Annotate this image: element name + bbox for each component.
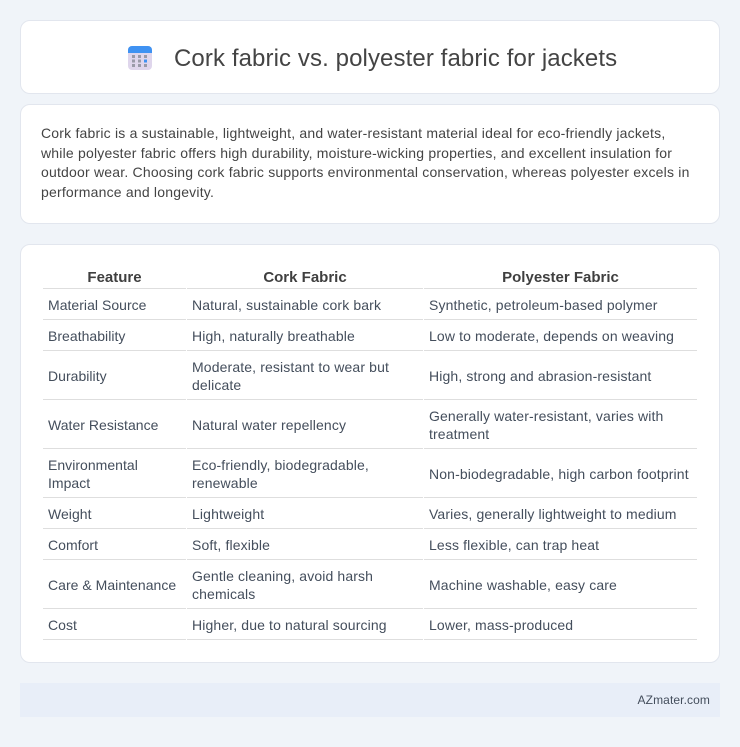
table rows text: Weight	[48, 506, 92, 522]
table rows text: Gentle cleaning, avoid harsh	[192, 568, 373, 584]
table rows text: Natural water repellency	[192, 417, 346, 433]
table rows text: Low to moderate, depends on weaving	[429, 328, 674, 344]
footer credit: AZmater.com	[638, 693, 710, 707]
table rows text: Soft, flexible	[192, 537, 270, 553]
table rows text: Higher, due to natural sourcing	[192, 617, 387, 633]
title: Cork fabric vs. polyester fabric for jackets	[174, 45, 617, 72]
icon: calendar	[128, 46, 152, 70]
table rows text: Comfort	[48, 537, 98, 553]
table rows text: treatment	[429, 426, 489, 442]
table rows text: Synthetic, petroleum-based polymer	[429, 297, 658, 313]
table rows text: Non-biodegradable, high carbon footprint	[429, 466, 689, 482]
header: Feature: Feature	[87, 269, 142, 286]
table rows text: High, naturally breathable	[192, 328, 355, 344]
table rows text: Varies, generally lightweight to medium	[429, 506, 677, 522]
intro text: outdoor wear. Choosing cork fabric supports environmental conservation, whereas polyester excels in	[41, 164, 690, 180]
table rows text: Durability	[48, 368, 107, 384]
header: Cork Fabric	[187, 268, 423, 289]
table rows text: Breathability	[48, 328, 125, 344]
table rows text: Cost	[48, 617, 77, 633]
header: Feature	[43, 268, 186, 289]
table rows text: delicate	[192, 377, 241, 393]
table rows text: Impact	[48, 475, 90, 491]
intro text: Cork fabric is a sustainable, lightweight, and water-resistant material ideal for eco-friendly jackets,	[41, 125, 665, 141]
header: Polyester Fabric	[424, 268, 697, 289]
table rows text: chemicals	[192, 586, 255, 602]
header: Polyester Fabric: Polyester Fabric	[502, 269, 619, 286]
title card	[20, 20, 720, 94]
table rows text: renewable	[192, 475, 258, 491]
table rows text: Material Source	[48, 297, 146, 313]
panel: comparison table	[20, 244, 720, 663]
intro text: performance and longevity.	[41, 184, 214, 200]
table rows text: High, strong and abrasion-resistant	[429, 368, 651, 384]
table rows text: Moderate, resistant to wear but	[192, 359, 389, 375]
table rows text: Lower, mass-produced	[429, 617, 573, 633]
table rows text: Care & Maintenance	[48, 577, 176, 593]
intro text: while polyester fabric offers high durability, moisture-wicking properties, and excellent insulation for	[41, 145, 672, 161]
table rows text: Lightweight	[192, 506, 264, 522]
table rows text: Water Resistance	[48, 417, 158, 433]
table rows text: Eco-friendly, biodegradable,	[192, 457, 369, 473]
table rows text: Less flexible, can trap heat	[429, 537, 599, 553]
intro panel	[20, 104, 720, 224]
table rows text: Environmental	[48, 457, 138, 473]
table rows text: Generally water-resistant, varies with	[429, 408, 663, 424]
table rows text: Machine washable, easy care	[429, 577, 617, 593]
footer bar	[20, 683, 720, 717]
table rows text: Natural, sustainable cork bark	[192, 297, 381, 313]
header: Cork Fabric: Cork Fabric	[263, 269, 347, 286]
intro text	[41, 125, 690, 200]
